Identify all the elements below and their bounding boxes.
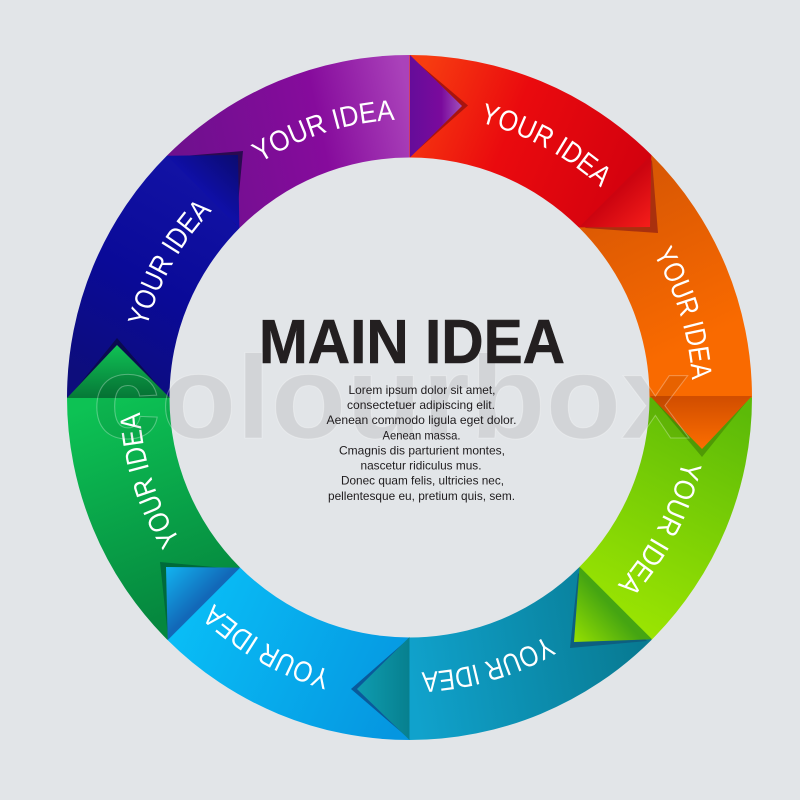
- segment: teal: YOUR IDEA: [422, 639, 556, 692]
- body text: consectetuer adipiscing elit.: [347, 398, 495, 412]
- arrow: purple into red: [410, 55, 468, 158]
- segment: red: YOUR IDEA: [486, 103, 608, 188]
- arrow: teal into blue: [351, 637, 410, 740]
- segment: orange: [579, 155, 752, 398]
- arrow: navy into purple: [167, 151, 243, 228]
- segment: navy: YOUR IDEA: [128, 202, 212, 321]
- arrow: green into navy: [67, 338, 170, 398]
- segment: sky blue: [167, 567, 410, 740]
- arrow: orange into lime: [650, 396, 752, 457]
- segment: navy: [67, 155, 240, 398]
- segment: teal: [410, 567, 652, 740]
- segment: purple: YOUR IDEA: [250, 100, 395, 160]
- body text: Aenean massa.: [382, 428, 460, 442]
- body text: Donec quam felis, ultricies nec,: [341, 474, 504, 488]
- segment: red: [410, 55, 652, 228]
- body text: Aenean commodo ligula eget dolor.: [326, 413, 516, 427]
- arrow: red into orange: [579, 155, 658, 233]
- arrow: blue into green: [160, 562, 240, 640]
- cycle ring: [67, 55, 752, 740]
- segment: green: YOUR IDEA: [120, 412, 177, 550]
- segment: lime green: YOUR IDEA: [618, 466, 702, 592]
- body text: pellentesque eu, pretium quis, sem.: [328, 489, 515, 503]
- segment: purple: [167, 55, 410, 228]
- arrow: lime into teal: [570, 567, 652, 648]
- segment: sky blue: YOUR IDEA: [206, 604, 325, 690]
- body text: [326, 383, 516, 503]
- segment: lime green: [579, 398, 752, 640]
- watermark: colourbox: [92, 332, 690, 464]
- body text: Cmagnis dis parturient montes,: [339, 444, 505, 458]
- segment: orange: YOUR IDEA: [656, 244, 712, 380]
- segment: green: [67, 398, 240, 640]
- body text: nascetur ridiculus mus.: [360, 458, 482, 472]
- title: MAIN IDEA: [259, 307, 565, 377]
- body text: Lorem ipsum dolor sit amet,: [348, 383, 496, 397]
